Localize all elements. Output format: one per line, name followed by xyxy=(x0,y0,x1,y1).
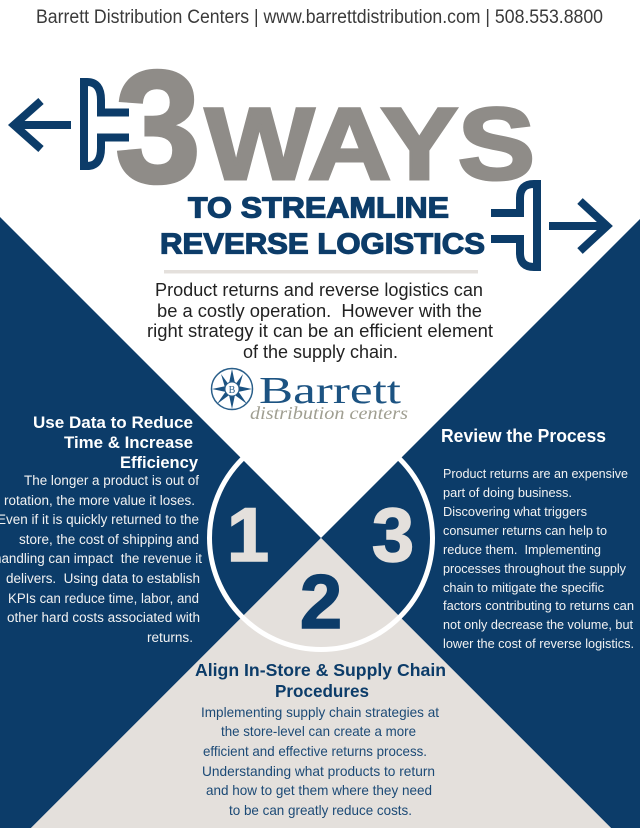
body: step 2: to be can greatly reduce costs. xyxy=(229,802,412,818)
body: step 3: processes throughout the supply xyxy=(443,561,626,576)
icon: compass: B xyxy=(229,385,236,396)
panel: step 3 xyxy=(441,426,634,651)
panel: step 1 xyxy=(0,413,202,645)
body: step 3: Product returns are an expensive xyxy=(443,466,628,481)
number 1: 1 xyxy=(227,493,269,578)
body: step 1: other hard costs associated with xyxy=(7,610,200,625)
body: step 1: Even if it is quickly returned to the xyxy=(0,512,199,527)
icon: left arrow xyxy=(14,101,71,149)
body: step 3: part of doing business. xyxy=(443,485,572,500)
body: step 3: factors contributing to returns can xyxy=(443,598,634,613)
number 2: 2 xyxy=(300,560,342,645)
heading: step 2: Align In-Store & Supply Chain xyxy=(195,660,446,680)
body: step 3: reduce them. Implementing xyxy=(443,542,601,557)
logo: Barrett: distribution centers xyxy=(250,403,408,423)
heading: step 2 xyxy=(195,660,446,701)
heading: step 1: Efficiency xyxy=(120,453,199,472)
logo: Barrett: Barrett xyxy=(259,370,402,412)
body: step 2: Implementing supply chain strategies at xyxy=(201,704,439,720)
intro text: of the supply chain. xyxy=(243,342,398,362)
body: step 1 xyxy=(0,473,202,645)
heading: step 1: Use Data to Reduce xyxy=(33,413,193,432)
body: step 3: not only decrease the volume, but xyxy=(443,617,633,632)
subtitle: REVERSE LOGISTICS xyxy=(160,228,485,260)
number 3: 3 xyxy=(372,493,414,578)
heading: step 1: Time & Increase xyxy=(64,433,193,452)
logo: Barrett xyxy=(212,368,408,423)
title WAYS: WAYS xyxy=(205,87,535,201)
body: step 3: consumer returns can help to xyxy=(443,523,607,538)
body: step 2: Understanding what products to return xyxy=(202,763,435,779)
intro text: right strategy it can be an efficient element xyxy=(147,321,493,341)
body: step 3: lower the cost of reverse logistics. xyxy=(443,636,634,651)
subtitle xyxy=(160,192,485,260)
intro text: be a costly operation. However with the xyxy=(157,301,482,321)
intro text: Product returns and reverse logistics can xyxy=(155,280,483,300)
body: step 3 xyxy=(443,466,634,651)
intro text xyxy=(147,280,493,362)
title number 3: 3 xyxy=(115,37,201,216)
heading: step 3: Review the Process xyxy=(441,426,606,446)
body: step 1: rotation, the more value it loses. xyxy=(4,493,195,508)
body: step 1: returns. xyxy=(147,630,193,645)
body: step 2: and how to get them where they need xyxy=(206,782,432,798)
body: step 3: Discovering what triggers xyxy=(443,504,587,519)
body: step 3: chain to mitigate the specific xyxy=(443,580,604,595)
panel: step 2 xyxy=(195,660,446,818)
subtitle: TO STREAMLINE xyxy=(188,192,449,224)
circle ring xyxy=(210,426,432,650)
divider xyxy=(164,270,478,274)
icon: right arrow xyxy=(549,201,607,251)
heading: step 2: Procedures xyxy=(275,681,369,701)
body: step 2 xyxy=(201,704,439,818)
body: step 2: efficient and effective returns process. xyxy=(203,743,427,759)
icon: left bracket xyxy=(84,82,129,166)
header contact line: Barrett Distribution Centers | www.barrettdistribution.com | 508.553.8800 xyxy=(36,7,603,28)
heading: step 1 xyxy=(33,413,199,472)
body: step 2: the store-level can create a more xyxy=(221,723,416,739)
icon: compass xyxy=(212,368,252,410)
body: step 1: handling can impact the revenue it xyxy=(0,551,202,566)
icon: right bracket xyxy=(491,184,537,267)
body: step 1: KPIs can reduce time, labor, and xyxy=(8,591,199,606)
body: step 1: delivers. Using data to establish xyxy=(6,571,200,586)
body: step 1: store, the cost of shipping and xyxy=(19,532,199,547)
body: step 1: The longer a product is out of xyxy=(24,473,199,488)
